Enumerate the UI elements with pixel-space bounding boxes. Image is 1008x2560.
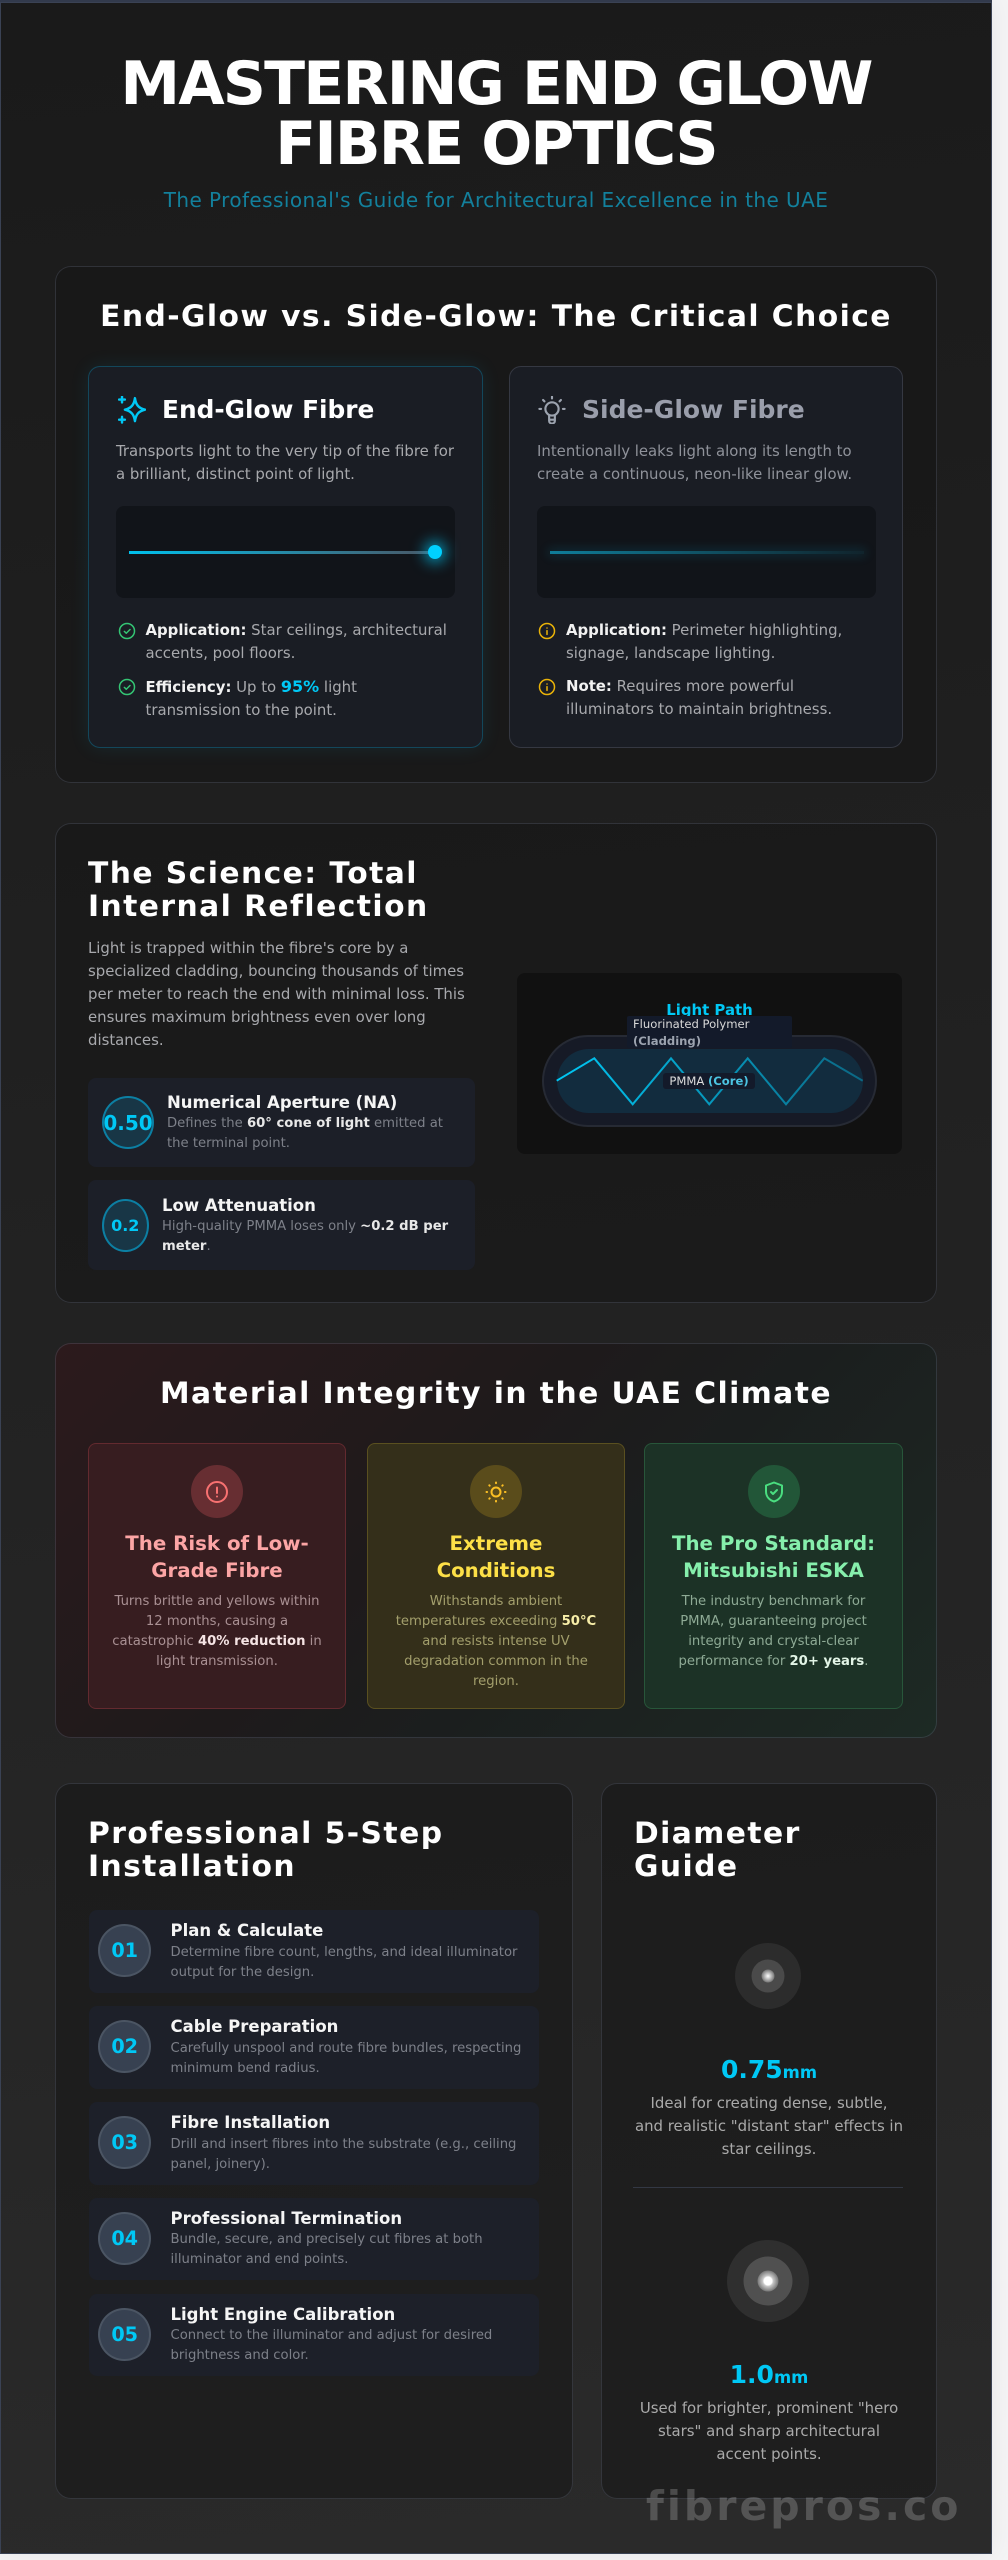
heading: 5-step installation: Professional 5-Step	[88, 1816, 443, 1850]
number	[98, 2308, 151, 2360]
heading: critical choice: End-Glow vs. Side-Glow: The Critical Choice	[100, 298, 892, 334]
size description: stars" and sharp architectural	[658, 2422, 880, 2440]
stat: low attenuation	[88, 1180, 475, 1270]
bullet: application	[118, 620, 447, 662]
card text: performance for 20+ years.	[678, 1654, 868, 1668]
paragraph: specialized cladding, bouncing thousands of times	[88, 962, 464, 980]
step 04	[89, 2198, 539, 2280]
light path zigzag	[556, 1056, 864, 1106]
card: end-glow fibre	[88, 366, 483, 748]
size description	[635, 2094, 903, 2158]
step text: minimum bend radius.	[170, 2060, 320, 2076]
size description: Ideal for creating dense, subtle,	[650, 2094, 888, 2112]
heading: end-glow fibre: End-Glow Fibre	[162, 395, 374, 424]
description: Intentionally leaks light along its length to	[537, 442, 852, 460]
card title: The Pro Standard:	[672, 1532, 875, 1555]
panel: installation steps	[55, 1783, 573, 2499]
description: create a continuous, neon-like linear glow.	[537, 465, 852, 483]
card text: light transmission.	[156, 1654, 278, 1668]
glowing tip	[428, 545, 442, 559]
step text: Carefully unspool and route fibre bundles, respecting	[170, 2040, 521, 2056]
end-glow demo	[116, 506, 455, 598]
step text: illuminator and end points.	[170, 2252, 348, 2267]
side-glow demo	[537, 506, 876, 598]
label: cladding	[627, 1016, 792, 1048]
number: 04	[111, 2226, 138, 2250]
heading: 5-step installation: Installation	[88, 1848, 296, 1884]
step title: Plan & Calculate	[170, 1921, 323, 1940]
glowing line	[550, 550, 864, 554]
stat description	[162, 1218, 448, 1254]
heading: material integrity: Material Integrity in the UAE Climate	[160, 1376, 832, 1410]
card: extreme conditions	[367, 1443, 625, 1709]
step 02	[89, 2006, 539, 2088]
text: signage, landscape lighting.	[566, 644, 775, 662]
icon: 0.75mm fibre point	[735, 1943, 801, 2009]
step text: Determine fibre count, lengths, and ideal illuminator	[170, 1944, 517, 1960]
paragraph: ensures maximum brightness even over long	[88, 1008, 426, 1026]
step title: Light Engine Calibration	[170, 2304, 395, 2324]
card text: degradation common in the	[404, 1654, 588, 1668]
paragraph: distances.	[88, 1031, 164, 1049]
card title: Grade Fibre	[151, 1559, 283, 1582]
step title: Fibre Installation	[170, 2113, 330, 2132]
step text	[170, 1944, 518, 1980]
heading: diameter guide	[634, 1816, 801, 1884]
panel: diameter guide	[601, 1783, 937, 2499]
card: low-grade risk	[88, 1443, 346, 1709]
card text	[112, 1594, 322, 1668]
text: transmission to the point.	[146, 701, 337, 719]
icon: info	[538, 678, 556, 696]
number	[98, 2116, 151, 2169]
card text: The industry benchmark for	[682, 1594, 865, 1608]
card text: region.	[473, 1674, 519, 1688]
step text: brightness and color.	[170, 2348, 309, 2363]
text: Efficiency: Up to 95% light	[146, 677, 357, 696]
title	[120, 49, 872, 179]
stat description: High-quality PMMA loses only ~0.2 dB per	[162, 1218, 448, 1234]
icon: shield	[748, 1465, 800, 1518]
step text	[170, 2136, 516, 2172]
card title: Conditions	[437, 1559, 555, 1582]
text	[146, 620, 447, 662]
paragraph: per meter to reach the end with minimal loss. This	[88, 985, 465, 1003]
step text: Bundle, secure, and precisely cut fibres at both	[170, 2232, 483, 2247]
diagram: fibre cross section	[517, 973, 902, 1154]
size label 0.75mm: 0.75mm	[721, 2055, 817, 2084]
step text: panel, joinery).	[170, 2156, 270, 2172]
card text: temperatures exceeding 50°C	[396, 1614, 596, 1628]
description	[537, 442, 852, 483]
step text: output for the design.	[170, 1964, 314, 1980]
stat: numerical aperture	[88, 1078, 475, 1167]
icon: 1.0mm fibre point	[727, 2240, 809, 2322]
icon: sun	[470, 1465, 522, 1518]
stat title: Low Attenuation	[162, 1196, 316, 1214]
step 05	[89, 2294, 539, 2376]
heading: total internal reflection: Internal Reflection	[88, 888, 429, 924]
number: 01	[111, 1939, 138, 1962]
label: core: PMMA (Core)	[669, 1074, 749, 1088]
icon: sparkles	[118, 396, 146, 424]
size description: star ceilings.	[722, 2140, 816, 2158]
label: cladding: (Cladding)	[633, 1034, 701, 1048]
step 01	[89, 1910, 539, 1992]
number	[98, 2212, 151, 2264]
fibre line	[129, 550, 435, 554]
watermark: fibrepros.co	[646, 2482, 961, 2530]
divider	[633, 2187, 903, 2188]
card text: Withstands ambient	[430, 1594, 562, 1608]
stat description: meter.	[162, 1238, 211, 1254]
text	[146, 677, 357, 719]
card title	[672, 1532, 875, 1582]
text	[566, 677, 832, 718]
stat description: Defines the 60° cone of light emitted at	[167, 1116, 443, 1130]
step text: Connect to the illuminator and adjust for desired	[170, 2328, 492, 2343]
text: Application: Perimeter highlighting,	[566, 620, 842, 638]
stat description	[167, 1116, 443, 1150]
icon: check	[118, 622, 136, 640]
heading: 5-step installation	[88, 1816, 443, 1884]
card text: and resists intense UV	[422, 1634, 570, 1648]
text: Note: Requires more powerful	[566, 677, 794, 695]
step text	[170, 2040, 521, 2076]
card text: Turns brittle and yellows within	[115, 1594, 319, 1608]
label: cladding: Fluorinated Polymer	[633, 1017, 749, 1031]
step text	[170, 2232, 483, 2267]
card text: 12 months, causing a	[146, 1614, 288, 1628]
card title	[437, 1532, 555, 1582]
size description: and realistic "distant star" effects in	[635, 2117, 903, 2135]
step title: Professional Termination	[170, 2208, 402, 2228]
card text	[678, 1594, 868, 1668]
value badge 0.50: 0.50	[103, 1110, 153, 1134]
card: side-glow fibre	[509, 366, 903, 748]
number: 03	[111, 2131, 138, 2154]
heading: total internal reflection: The Science: Total	[88, 856, 418, 890]
bullet: efficiency	[118, 677, 357, 719]
core	[557, 1049, 863, 1113]
heading: side-glow fibre: Side-Glow Fibre	[582, 395, 805, 424]
stat title: Numerical Aperture (NA)	[167, 1092, 397, 1112]
icon: light bulb	[538, 396, 566, 424]
panel: end-glow vs side-glow	[55, 266, 937, 783]
size description	[601, 2396, 937, 2466]
step title: Cable Preparation	[170, 2017, 338, 2036]
bullet: application	[538, 620, 842, 662]
number: 02	[111, 2035, 138, 2058]
number: 05	[111, 2322, 138, 2346]
card text: integrity and crystal-clear	[688, 1634, 859, 1648]
panel: material integrity	[55, 1343, 937, 1738]
size description: accent points.	[716, 2445, 822, 2463]
text: accents, pool floors.	[146, 644, 295, 662]
bullet: note	[538, 677, 832, 718]
value badge 0.50	[102, 1096, 154, 1149]
label: light path: Light Path	[666, 1001, 753, 1019]
card: pro standard	[644, 1443, 903, 1709]
paragraph: Light is trapped within the fibre's core by a	[88, 938, 408, 956]
card title	[125, 1532, 309, 1582]
card title: Mitsubishi ESKA	[683, 1559, 864, 1582]
card text: PMMA, guaranteeing project	[680, 1614, 867, 1628]
heading: diameter guide: Guide	[634, 1848, 738, 1884]
step text: Drill and insert fibres into the substrate (e.g., ceiling	[170, 2136, 516, 2152]
value badge 0.2: 0.2	[111, 1216, 139, 1235]
card title: The Risk of Low-	[125, 1532, 309, 1555]
card title: Extreme	[450, 1532, 542, 1555]
icon: check	[118, 678, 136, 696]
paragraph	[88, 938, 465, 1049]
size label 1.0mm: 1.0mm	[730, 2360, 808, 2389]
title: FIBRE OPTICS	[275, 109, 717, 179]
number	[98, 1924, 151, 1977]
step text	[170, 2328, 492, 2363]
card text: catastrophic 40% reduction in	[112, 1634, 322, 1648]
icon: info	[538, 622, 556, 640]
cladding	[542, 1035, 877, 1127]
description: a brilliant, distinct point of light.	[116, 465, 355, 483]
subtitle: The Professional's Guide for Architectural Excellence in the UAE	[164, 188, 828, 212]
heading: total internal reflection	[88, 856, 429, 924]
stat description: the terminal point.	[167, 1136, 290, 1150]
card text	[396, 1594, 596, 1688]
title: MASTERING END GLOW	[120, 49, 872, 119]
heading: diameter guide: Diameter	[634, 1816, 801, 1850]
panel: the science	[55, 823, 937, 1303]
description: Transports light to the very tip of the fibre for	[116, 442, 454, 460]
text: illuminators to maintain brightness.	[566, 700, 832, 718]
number	[98, 2020, 151, 2073]
text: Application: Star ceilings, architectural	[146, 620, 447, 638]
text	[566, 620, 842, 662]
icon: alert	[191, 1465, 243, 1518]
size description: Used for brighter, prominent "hero	[640, 2398, 898, 2416]
step 03	[89, 2102, 539, 2184]
value badge 0.2	[102, 1199, 148, 1252]
description	[116, 442, 454, 483]
